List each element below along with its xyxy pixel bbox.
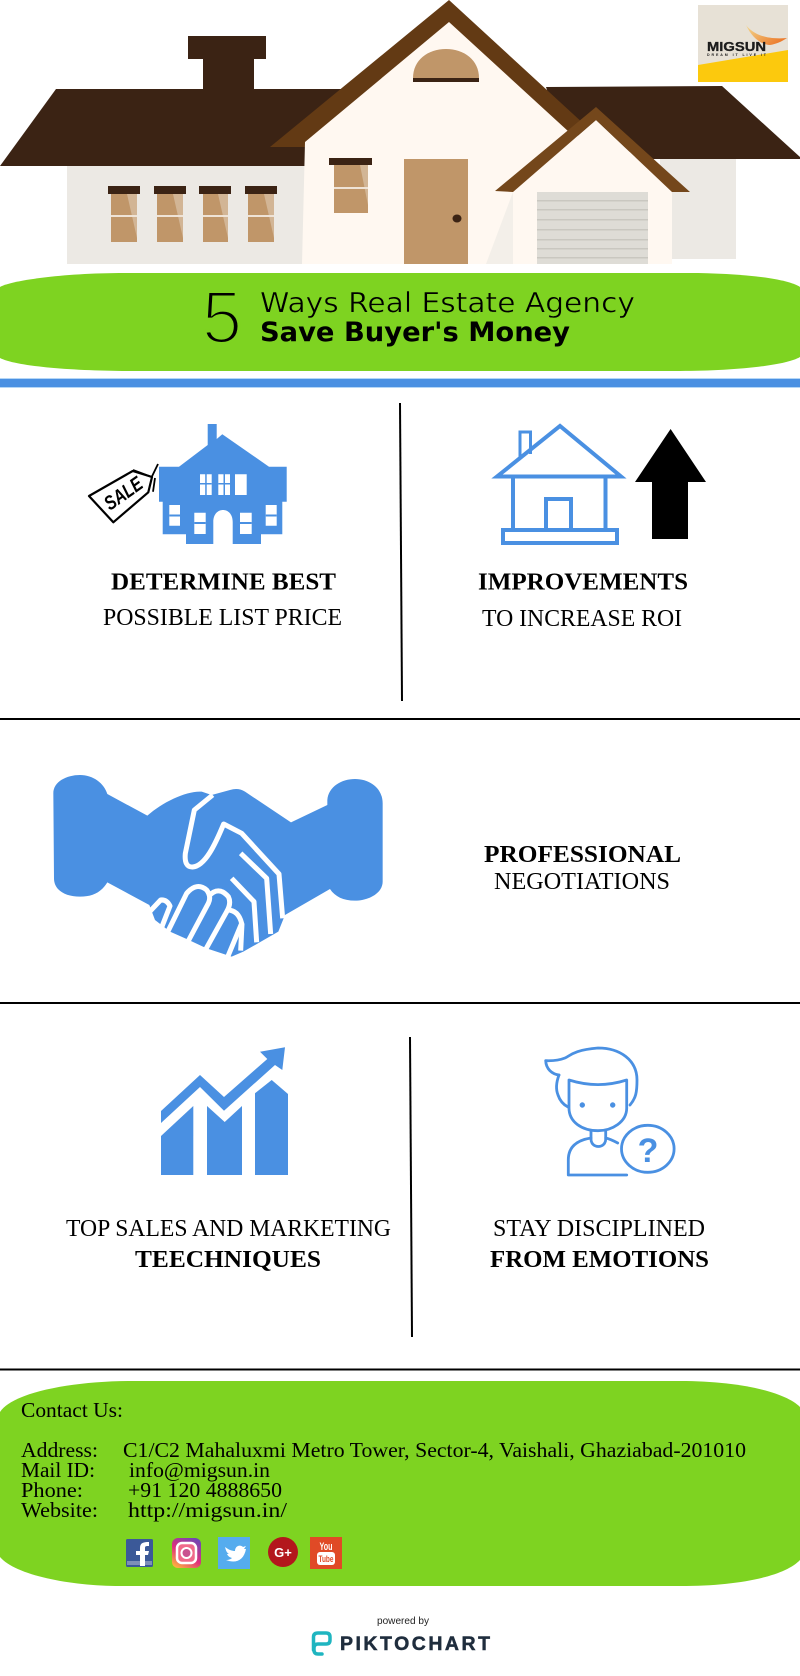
garage shadow xyxy=(486,192,513,264)
powered by: powered by xyxy=(377,1615,430,1627)
contact: mail xyxy=(21,1458,270,1482)
panel: contact xyxy=(0,1381,800,1586)
contact: phone: +91 120 4888650 xyxy=(128,1478,282,1502)
contact: phone xyxy=(21,1478,282,1502)
garage wall xyxy=(513,120,672,264)
title line one: Ways Real Estate Agency xyxy=(260,287,635,319)
front window xyxy=(329,158,372,213)
divider: top sections xyxy=(400,403,402,701)
icon: youtube xyxy=(310,1537,342,1569)
logo wordmark: MIGSUN xyxy=(707,40,766,54)
sale tag xyxy=(89,471,152,522)
question mark: ? xyxy=(638,1132,658,1170)
divider: footer top xyxy=(0,1368,800,1370)
heading: professional: PROFESSIONAL xyxy=(484,842,681,868)
garage roof xyxy=(495,107,690,192)
piktochart wordmark: PIKTOCHART xyxy=(340,1633,490,1655)
blue rule xyxy=(0,378,800,388)
main wall xyxy=(302,22,600,264)
icon: house with sale tag xyxy=(89,424,287,544)
panel: stay disciplined xyxy=(490,1048,709,1273)
logo tagline: DREAM IT LIVE IT xyxy=(707,53,767,57)
heading: teechniques: TEECHNIQUES xyxy=(135,1247,321,1273)
left roof xyxy=(0,89,345,166)
contact: mail: info@migsun.in xyxy=(129,1458,270,1482)
logo wing xyxy=(746,25,787,45)
left wing windows xyxy=(108,186,277,242)
contact: website: Website: xyxy=(21,1498,98,1522)
divider: bottom sections xyxy=(410,1037,412,1337)
heading: improvements: IMPROVEMENTS xyxy=(478,570,688,596)
contact: address: C1/C2 Mahaluxmi Metro Tower, Sector-4, Vaishali, Ghaziabad-201010 xyxy=(123,1438,746,1462)
panel: improvements xyxy=(478,426,706,632)
icon: youtube: You xyxy=(320,1541,332,1553)
icon: person with question xyxy=(546,1048,674,1175)
heading: from emotions: FROM EMOTIONS xyxy=(490,1247,709,1273)
icon: facebook xyxy=(126,1539,153,1567)
title number: 5 xyxy=(202,276,242,359)
text: possible list price: POSSIBLE LIST PRICE xyxy=(103,605,342,631)
divider: section two top xyxy=(0,718,800,720)
text: top sales and marketing: TOP SALES AND MARKETING xyxy=(66,1216,391,1242)
right roof xyxy=(546,86,800,159)
icon: google plus: G+ xyxy=(274,1545,292,1560)
panel: sales and marketing xyxy=(66,1047,391,1273)
garage door xyxy=(537,192,648,264)
panel: list price xyxy=(89,424,342,631)
panel: negotiations xyxy=(53,775,681,959)
sale tag label: SALE xyxy=(100,473,148,515)
icon: youtube: Tube xyxy=(318,1554,334,1564)
chimney xyxy=(188,36,266,92)
text: negotiations: NEGOTIATIONS xyxy=(494,869,670,895)
divider: section three top xyxy=(0,1002,800,1004)
icon: twitter xyxy=(218,1537,250,1569)
icon: growth chart xyxy=(161,1047,288,1175)
contact: address: Address: xyxy=(21,1438,98,1462)
contact: mail: Mail ID: xyxy=(21,1458,95,1482)
icon: instagram xyxy=(172,1538,201,1568)
text: to increase roi: TO INCREASE ROI xyxy=(482,606,682,632)
title banner xyxy=(0,273,800,371)
text: stay disciplined: STAY DISCIPLINED xyxy=(493,1216,705,1242)
logo: Migsun xyxy=(698,5,788,82)
footer credit xyxy=(314,1615,490,1655)
contact: phone: Phone: xyxy=(21,1478,83,1502)
icon: handshake xyxy=(53,775,383,959)
icon: outline house xyxy=(497,426,621,543)
main gable roof xyxy=(270,0,585,147)
icon: piktochart mark xyxy=(314,1633,330,1654)
left wing wall xyxy=(67,166,307,264)
contact: website: http://migsun.in/ xyxy=(128,1498,287,1522)
icon: up arrow xyxy=(635,429,706,539)
right wing wall xyxy=(660,159,736,259)
icon: google plus xyxy=(268,1537,298,1567)
heading: determine best: DETERMINE BEST xyxy=(111,570,336,596)
contact heading: Contact Us: xyxy=(21,1398,123,1422)
contact: website xyxy=(21,1498,287,1522)
round attic window xyxy=(413,49,479,82)
social icons xyxy=(126,1537,342,1569)
title line two: Save Buyer's Money xyxy=(260,317,570,348)
illustration: house xyxy=(0,0,800,264)
front door xyxy=(404,159,468,264)
